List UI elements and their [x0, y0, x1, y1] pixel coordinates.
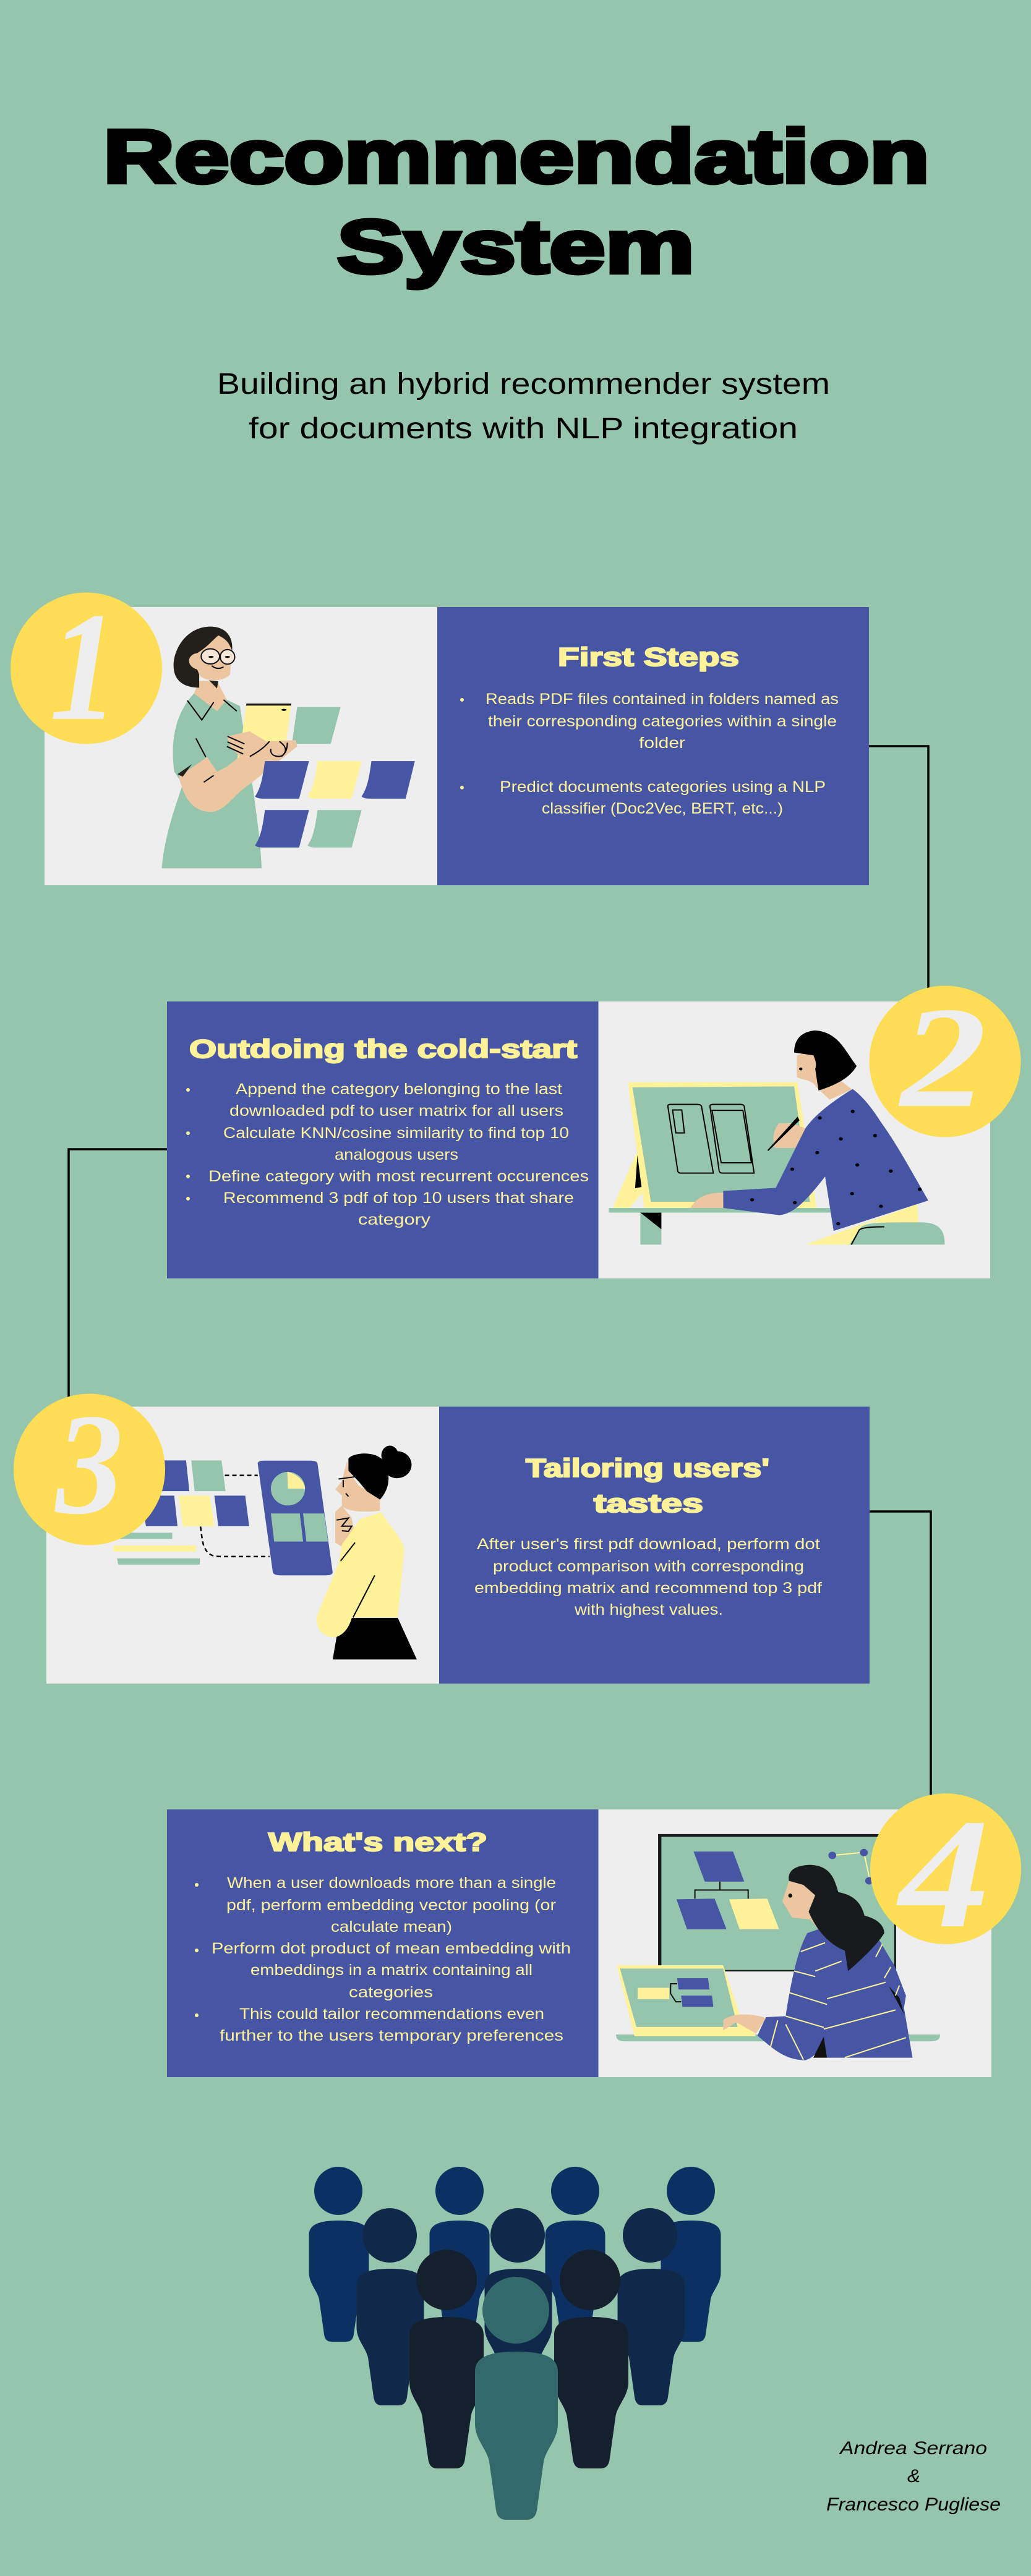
icon: number 4 badge: 4 — [896, 1787, 990, 1960]
credits: Francesco Pugliese — [826, 2494, 1001, 2515]
text: step 4 bullets: This could tailor recommendations even — [239, 2005, 544, 2023]
title: System — [337, 205, 695, 289]
text: step 2 bullets: Calculate KNN/cosine similarity to find top 10 — [223, 1124, 569, 1142]
illustration: woman thinking beside phone dashboard — [112, 1445, 417, 1659]
icon: number 1 badge: 1 — [49, 580, 118, 753]
heading: Tailoring users' tastes: tastes — [594, 1489, 703, 1518]
heading: Tailoring users' tastes: Tailoring users' — [526, 1453, 769, 1482]
heading: Tailoring users' tastes — [526, 1453, 769, 1518]
subtitle: Building an hybrid recommender system — [217, 368, 830, 401]
icon: number 4 badge — [870, 1787, 1021, 1960]
text: step 4 bullets: When a user downloads more than a single — [227, 1874, 556, 1892]
credits: Andrea Serrano — [839, 2438, 987, 2459]
back row people — [309, 2167, 721, 2342]
credits: & — [907, 2466, 920, 2486]
text: step 3 paragraph: product comparison with corresponding — [493, 1558, 804, 1575]
text: step 4 bullets: categories — [349, 1984, 433, 2001]
front row people — [409, 2250, 628, 2468]
arrow: connector step 2 to 3 — [69, 1149, 167, 1397]
illustration: woman at laptop with flow chart board — [616, 1834, 940, 2060]
text: step 3 paragraph: with highest values. — [574, 1601, 723, 1618]
subtitle: for documents with NLP integration — [249, 412, 798, 445]
panel: step 2 outdoing the cold-start — [167, 1001, 990, 1278]
text: step 4 bullets: Perform dot product of mean embedding with — [212, 1940, 571, 1957]
arrow: connector step 3 to 4 — [870, 1511, 931, 1796]
illustration: woman drawing at a tablet easel — [609, 1031, 945, 1244]
text: step 4 bullets: pdf, perform embedding vector pooling (or — [226, 1897, 556, 1914]
credits — [826, 2438, 1001, 2515]
icon: number 2 badge: 2 — [898, 977, 986, 1137]
lead person — [475, 2277, 558, 2520]
text: step 2 bullets — [186, 1081, 589, 1228]
icon: crowd of people silhouettes — [309, 2167, 721, 2520]
text: step 1 bullets: folder — [639, 734, 685, 752]
text: step 1 bullets — [460, 691, 839, 817]
text: step 1 bullets: Reads PDF files contained in folders named as — [486, 691, 839, 708]
text: step 2 bullets: category — [358, 1211, 431, 1228]
text: step 2 bullets: Recommend 3 pdf of top 10 users that share — [223, 1189, 574, 1207]
text: step 2 bullets: Append the category belonging to the last — [236, 1081, 562, 1098]
text: step 2 bullets: analogous users — [335, 1146, 458, 1163]
heading: First Steps: First Steps — [558, 642, 739, 671]
text: step 4 bullets: further to the users temporary preferences — [220, 2027, 563, 2044]
heading: What's next?: What's next? — [268, 1827, 487, 1856]
text: step 3 paragraph: After user's first pdf download, perform dot — [477, 1536, 820, 1553]
text: step 1 bullets: their corresponding categories within a single — [488, 713, 837, 730]
text: step 1 bullets: Predict documents categories using a NLP — [500, 778, 826, 796]
text: step 4 bullets: calculate mean) — [331, 1918, 452, 1936]
text: step 2 bullets: Define category with most recurrent occurences — [208, 1168, 589, 1185]
icon: number 2 badge — [870, 977, 1020, 1137]
text: step 1 bullets: classifier (Doc2Vec, BERT, etc...) — [542, 800, 783, 817]
panel: step 3 tailoring users' tastes — [46, 1407, 870, 1684]
title: Recommendation — [103, 114, 930, 198]
icon: number 1 badge — [11, 580, 162, 753]
heading: Outdoing the cold-start: Outdoing the cold-start — [189, 1034, 577, 1063]
text: step 4 bullets — [195, 1874, 571, 2044]
text: step 3 paragraph — [474, 1536, 822, 1618]
text: step 3 paragraph: embedding matrix and recommend top 3 pdf — [474, 1579, 822, 1597]
text: step 4 bullets: embeddings in a matrix containing all — [250, 1962, 533, 1979]
middle row people — [356, 2208, 685, 2405]
panel: step 1 first steps — [45, 607, 869, 885]
panel: step 4 what's next — [167, 1809, 991, 2077]
subtitle — [217, 368, 830, 445]
illustration: woman with tablet and document tiles — [161, 627, 415, 869]
text: step 2 bullets: downloaded pdf to user matrix for all users — [229, 1102, 563, 1120]
icon: number 3 badge: 3 — [54, 1384, 123, 1544]
title — [103, 114, 930, 289]
icon: number 3 badge — [14, 1384, 165, 1545]
arrow: connector step 1 to 2 — [869, 746, 928, 989]
